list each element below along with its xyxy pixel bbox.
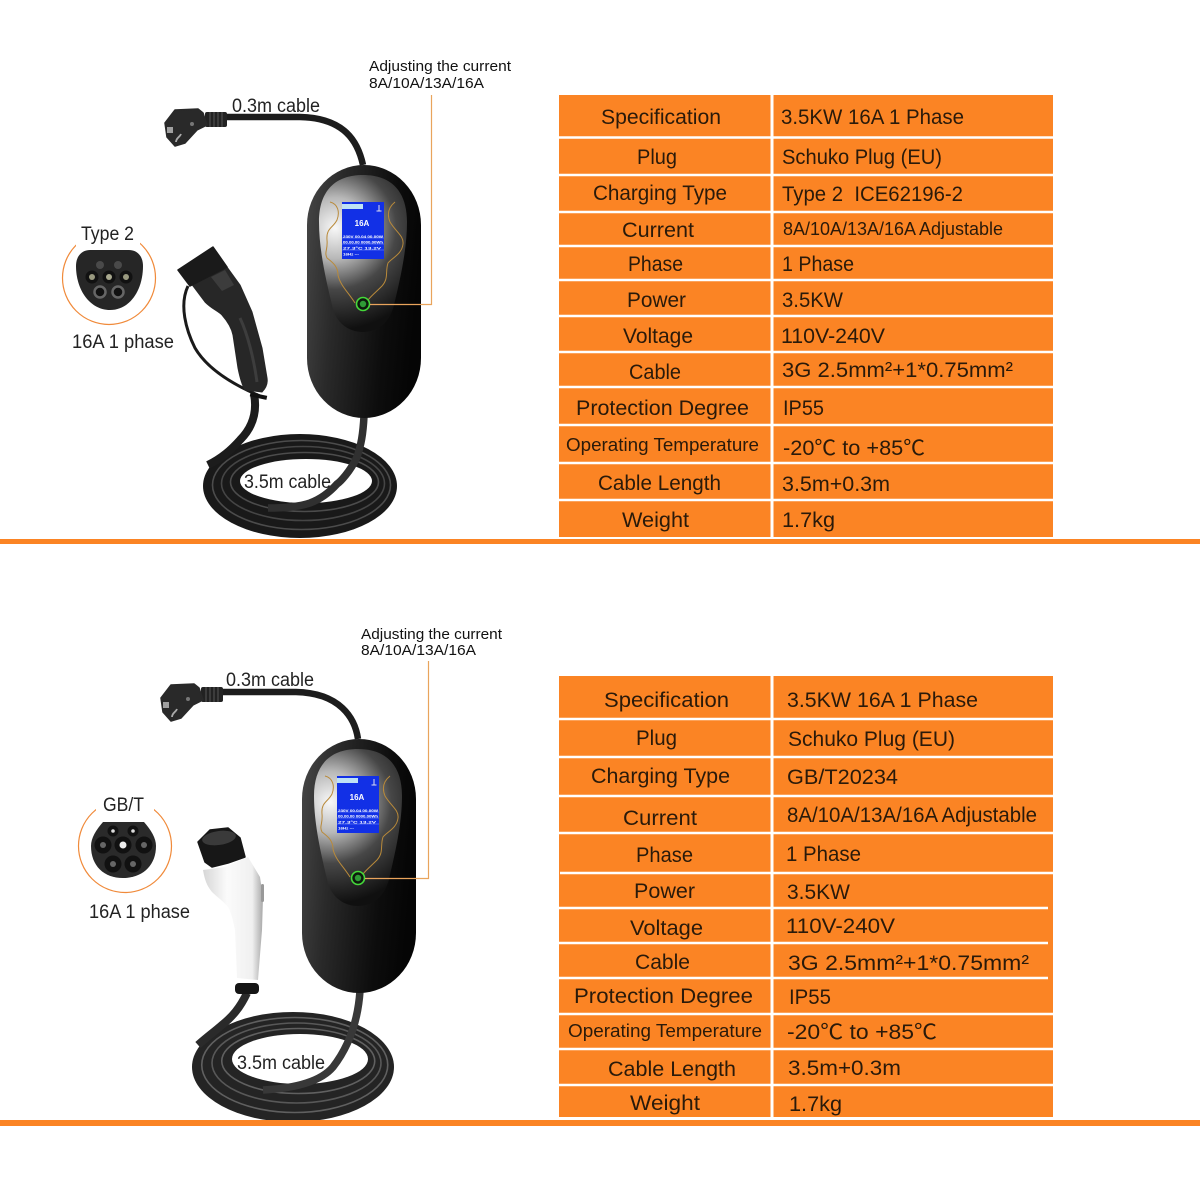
row: power [634,880,850,904]
row: current [623,804,1037,830]
connector badge: type 2 [62,222,156,324]
label: 16A 1 phase: 16A 1 phase [72,332,174,353]
row: specification: Specification [604,689,729,712]
power button [352,872,364,884]
row: phase: Phase [628,253,683,276]
charging gun [198,828,264,994]
label: 0.3m cable: 0.3m cable [226,670,314,691]
row: voltage [623,325,885,348]
display: 27.3°C 13.2V [343,246,382,250]
row: cable [629,359,1013,384]
row: power: Power [627,289,686,312]
row: specification: 3.5KW 16A 1 Phase [781,106,964,129]
display: 16A [355,219,370,228]
gun cable [198,993,247,1045]
display: 16Hz --- [343,252,360,256]
row: operating temperature: Operating Temperature [566,435,759,455]
row: charging type [591,765,898,789]
row: current: 8A/10A/13A/16A Adjustable [787,804,1037,827]
row: protection degree [576,397,824,420]
display: 16A [350,793,365,802]
mains cable [226,117,363,165]
row: operating temperature [566,435,925,460]
callout leader line [365,661,428,878]
coiled cable [192,1012,394,1122]
gold flame lines [326,202,403,303]
row: cable length: Cable Length [598,472,721,495]
orange divider bottom [0,1120,1200,1126]
coiled cable [203,434,397,538]
charging gun [178,247,267,400]
row: protection degree: IP55 [789,986,831,1009]
callout text: adjusting the current [369,58,512,92]
row: cable length: 3.5m+0.3m [788,1057,901,1080]
row: cable length: 3.5m+0.3m [782,473,890,496]
row: charging type: Type 2 ICE62196-2 [782,183,963,206]
display [337,776,379,833]
row: weight [630,1092,842,1116]
display: 27.3°C 13.2V [338,820,377,824]
row: charging type: Charging Type [591,765,730,788]
row: power: 3.5KW [782,289,843,312]
row: weight: Weight [630,1092,700,1115]
glossy face [319,175,407,332]
row: plug [636,727,955,751]
display: 16Hz --- [338,826,355,830]
callout text: adjusting the current: 8A/10A/13A/16A [361,642,476,659]
row: voltage: Voltage [623,325,693,348]
row: cable [635,951,1029,975]
row: operating temperature: -20℃ to +85℃ [783,437,925,460]
row: plug: Schuko Plug (EU) [782,146,942,169]
row: specification [604,689,978,712]
row: phase: 1 Phase [782,253,854,276]
display: 230V 00.04 00.00W [338,808,378,813]
row: cable: 3G 2.5mm²+1*0.75mm² [788,952,1029,975]
gun loop wire [184,286,265,398]
row: operating temperature: Operating Temperature [568,1021,762,1041]
row: cable: Cable [635,951,690,974]
icon: gb/t socket [91,822,156,878]
callout text: adjusting the current: Adjusting the current [369,58,512,75]
row: specification [601,106,964,129]
row: phase: Phase [636,844,693,867]
row: cable length [608,1057,901,1081]
row: operating temperature [568,1021,937,1044]
row: phase [636,843,861,867]
row: current: Current [622,219,694,242]
row: cable length: Cable Length [608,1058,736,1081]
row: power [627,289,843,312]
control box [307,165,421,418]
row: power: 3.5KW [787,881,850,904]
row: weight [622,509,835,532]
row: plug: Plug [636,727,677,750]
glossy face [314,749,402,906]
orange divider top [0,539,1200,544]
row: weight: 1.7kg [782,509,835,532]
row: charging type: Charging Type [593,182,727,205]
row: voltage [630,915,895,940]
row: charging type: GB/T20234 [787,766,898,789]
row: specification: Specification [601,106,721,129]
row: phase: 1 Phase [786,843,861,866]
gun cable [208,394,255,465]
label: 0.3m cable: 0.3m cable [232,96,320,117]
table: gb/t specification [559,676,1053,1117]
row: plug: Schuko Plug (EU) [788,728,955,751]
row: protection degree: Protection Degree [574,985,753,1008]
connector badge: gb/t [78,790,172,892]
icon: type 2 socket [76,250,143,310]
callout leader line [370,95,432,304]
row: cable: 3G 2.5mm²+1*0.75mm² [782,359,1013,382]
row: current: Current [623,807,697,830]
row: protection degree: IP55 [783,397,824,420]
row: specification: 3.5KW 16A 1 Phase [787,689,978,712]
gold flame lines [321,776,398,877]
row: phase [628,253,854,276]
row: plug [637,146,942,169]
label: gb/t: GB/T [103,795,144,816]
row: operating temperature: -20℃ to +85℃ [787,1021,937,1044]
display [342,202,384,259]
label: 16A 1 phase: 16A 1 phase [89,902,190,923]
schuko plug [161,684,223,721]
row: cable: Cable [629,361,681,384]
label: 3.5m cable: 3.5m cable [237,1053,325,1074]
display: 00.00.00 0000.00Wh [343,240,384,244]
device cable [263,991,360,1090]
table: type 2 specification [559,95,1053,537]
row: protection degree [574,985,831,1009]
row: charging type [593,182,963,206]
panel: gb/t charger [161,684,416,1122]
row: weight: Weight [622,509,689,532]
row: plug: Plug [637,146,677,169]
row: voltage: 110V-240V [786,915,895,938]
row: current: 8A/10A/13A/16A Adjustable [783,219,1003,239]
label: type 2: Type 2 [81,224,134,245]
callout text: adjusting the current: 8A/10A/13A/16A [369,75,484,92]
row: protection degree: Protection Degree [576,397,749,420]
row: current [622,219,1003,242]
display: 00.00.00 0000.00Wh [338,814,379,818]
row: voltage: 110V-240V [781,325,885,348]
callout text: adjusting the current [361,626,503,659]
display: 230V 00.04 00.00W [343,234,383,239]
row: voltage: Voltage [630,917,703,940]
control box [302,739,416,993]
label: 3.5m cable: 3.5m cable [244,472,331,493]
schuko plug [165,109,227,146]
device cable [268,416,364,508]
panel: type 2 charger [165,109,421,538]
row: cable length [598,472,890,496]
callout text: adjusting the current: Adjusting the current [361,626,503,643]
row: weight: 1.7kg [789,1093,842,1116]
row: power: Power [634,880,695,903]
power button [356,298,370,310]
mains cable [222,692,358,739]
